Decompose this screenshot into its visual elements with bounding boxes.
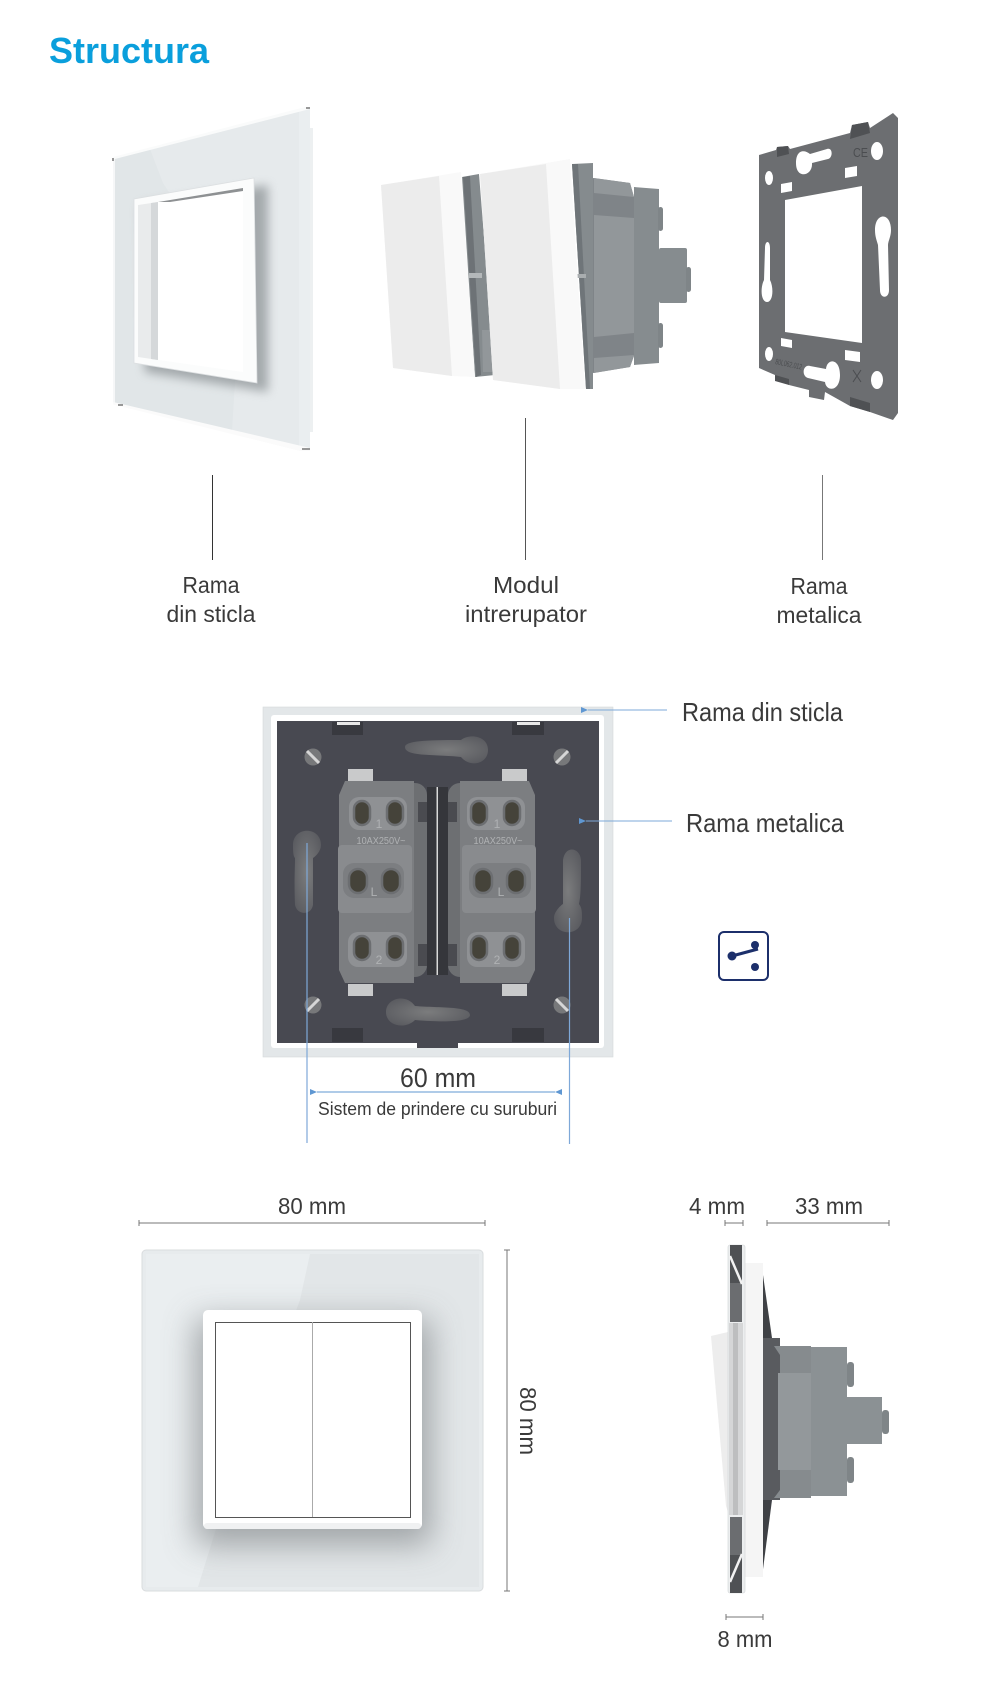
label: metal frame: metalica xyxy=(776,602,862,628)
dimension: 80 mm height: 80 mm xyxy=(515,1387,541,1455)
label: glass frame xyxy=(166,572,256,627)
caption: fixing system: Sistem de prindere cu suruburi xyxy=(318,1099,557,1119)
left rocker xyxy=(381,172,475,377)
gap between rockers xyxy=(462,174,495,377)
terminal block left: 10AX250V~ xyxy=(356,836,406,847)
metal frame wedge xyxy=(762,1268,772,1577)
dimension: 33 mm xyxy=(767,1193,889,1226)
leader line: glass frame xyxy=(212,475,214,560)
dimension: 33 mm: 33 mm xyxy=(795,1193,863,1219)
dimension: 8 mm xyxy=(718,1614,772,1652)
terminal block left: 2 xyxy=(376,953,383,967)
dimension: 80 mm width xyxy=(139,1193,485,1226)
module body xyxy=(572,163,691,389)
key frame xyxy=(203,1310,422,1529)
label: switch module: intrerupator xyxy=(465,601,587,627)
glass edge xyxy=(263,707,613,1057)
icon: two-way switch xyxy=(719,932,768,980)
keyhole slots xyxy=(293,736,582,1026)
arrow: glass frame callout xyxy=(588,709,667,711)
label: switch module: Modul xyxy=(493,572,559,598)
dark mounting plate xyxy=(277,721,599,1043)
mounting hole guide lines xyxy=(307,843,570,1144)
product: metal frame: 80L062.012 xyxy=(775,357,803,372)
side view of the switch xyxy=(711,1245,889,1593)
leader line: switch module xyxy=(524,418,526,560)
label: glass frame: din sticla xyxy=(166,601,256,627)
product: metal frame: CE xyxy=(853,145,868,160)
back view of the switch xyxy=(263,707,613,1057)
terminal block right: 2 xyxy=(494,953,501,967)
label: glass frame: Rama xyxy=(182,572,240,598)
terminal block left: 1 xyxy=(376,817,383,831)
label: switch module xyxy=(465,572,587,627)
glass edge xyxy=(728,1245,745,1593)
product: glass frame xyxy=(113,107,313,451)
centre divider xyxy=(427,787,448,975)
dimension: 8 mm: 8 mm xyxy=(718,1626,772,1652)
terminal block right: L xyxy=(498,885,505,899)
terminal block right: 1 xyxy=(494,817,501,831)
product: switch module xyxy=(381,159,691,389)
dimension: 80 mm height xyxy=(504,1250,541,1591)
dimension: 60 mm: 60 mm xyxy=(400,1063,476,1093)
label: metal frame xyxy=(776,573,862,628)
arrow: metal frame callout xyxy=(586,820,672,822)
module body xyxy=(763,1338,780,1500)
key side xyxy=(711,1332,728,1512)
callout: metal frame: Rama metalica xyxy=(686,808,844,838)
terminal block right xyxy=(448,769,536,996)
dimension: 4 mm: 4 mm xyxy=(689,1193,745,1219)
dimension: 80 mm width: 80 mm xyxy=(278,1193,346,1219)
label: metal frame: Rama xyxy=(790,573,848,599)
terminal block left xyxy=(338,769,427,996)
terminal block right: 10AX250V~ xyxy=(474,836,523,847)
callout: glass frame: Rama din sticla xyxy=(682,697,843,727)
front view of the switch xyxy=(142,1250,483,1591)
rocker keys xyxy=(216,1322,410,1518)
terminal block left: L xyxy=(371,885,378,899)
white plate xyxy=(745,1263,763,1577)
dimension arrow: 60 mm xyxy=(317,1091,555,1093)
title: Structura xyxy=(49,30,210,71)
product: metal frame xyxy=(759,113,898,420)
right rocker xyxy=(480,159,585,389)
leader line: metal frame xyxy=(822,475,824,560)
screws xyxy=(304,748,570,1014)
